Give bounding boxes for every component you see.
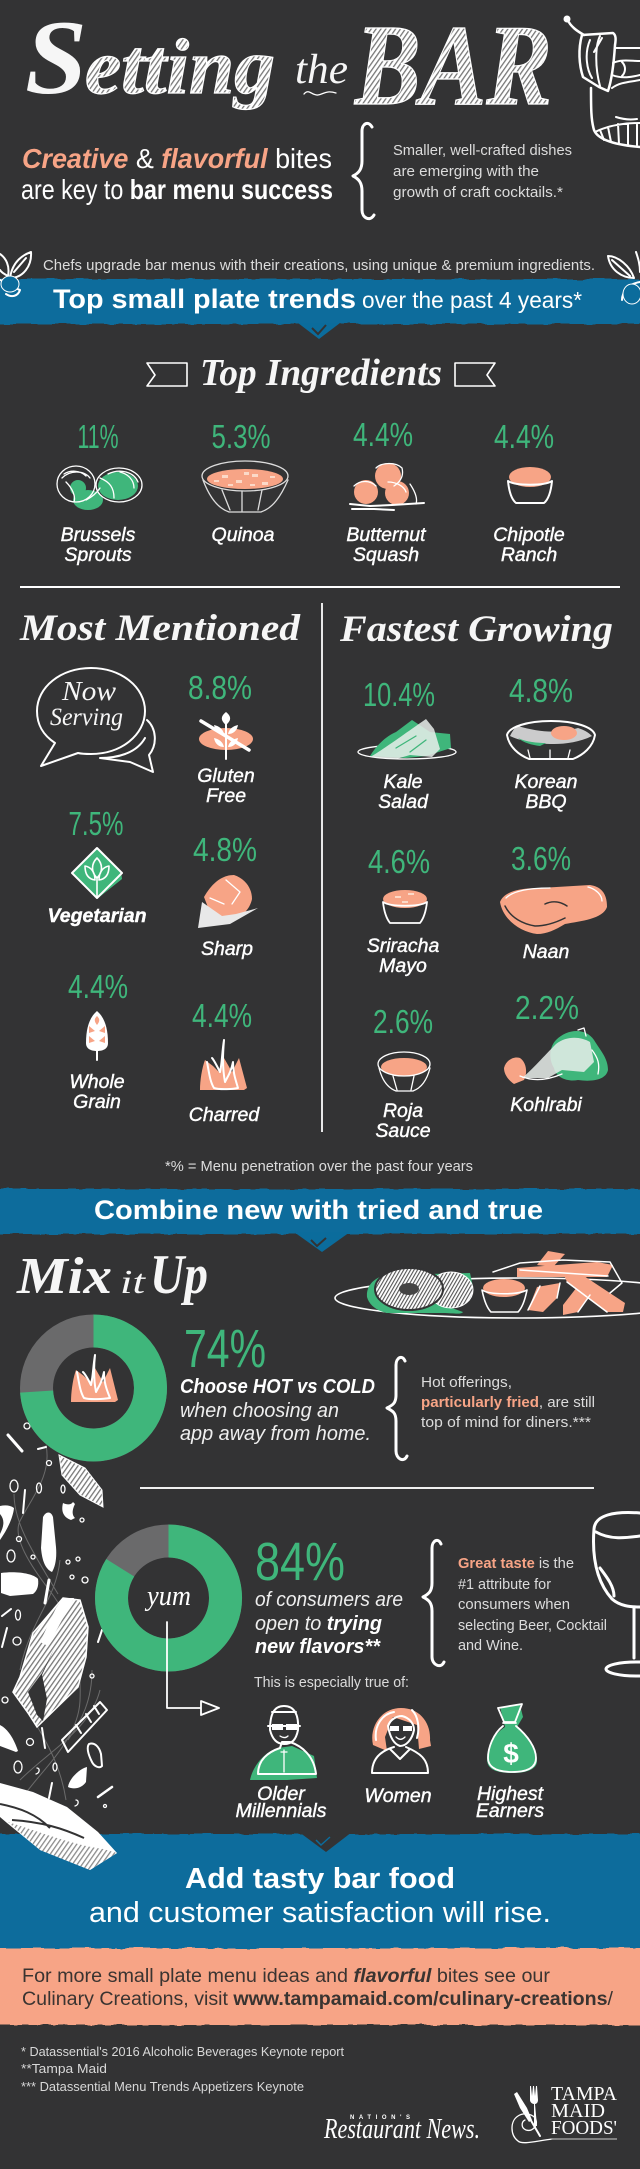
stat: 84 percent	[254, 1532, 409, 1691]
intro headline: are key to bar menu success	[21, 174, 333, 205]
item: butternut squash: Butternut	[346, 524, 427, 546]
heading: mix it up: it	[120, 1264, 147, 1301]
title: BAR	[353, 2, 552, 130]
item: sharp: Sharp	[201, 938, 253, 960]
item: kale salad	[358, 676, 456, 813]
logo: tampa maid foods: FOODS'	[551, 2117, 617, 2139]
note: great taste: selecting Beer, Cocktail	[458, 1618, 607, 1634]
item: kohlrabi: 2.2%	[515, 989, 579, 1026]
banner: top small plate trends: over the past 4 years*	[362, 287, 582, 313]
note: hot offerings: particularly fried , are still	[421, 1395, 595, 1411]
item: kale salad: Kale	[383, 771, 423, 793]
divider	[20, 586, 620, 588]
item: korean bbq: 4.8%	[509, 672, 573, 709]
brace	[353, 123, 374, 219]
donut chart: 74 percent	[36, 1331, 150, 1445]
item: roja sauce: 2.6%	[373, 1003, 433, 1040]
now serving speech bubble	[37, 668, 155, 772]
intro headline	[21, 143, 333, 205]
brace	[423, 1540, 444, 1666]
item: kohlrabi	[504, 989, 608, 1116]
stat: 74 percent: 74%	[184, 1319, 266, 1379]
item: chipotle ranch: 4.4%	[494, 418, 554, 455]
item: quinoa: 5.3%	[212, 418, 270, 455]
person: highest earners: Highest	[477, 1783, 545, 1805]
icon: wine glass	[594, 1513, 640, 1676]
item: sriracha mayo: Mayo	[379, 955, 427, 977]
person: older millennials	[235, 1706, 327, 1822]
stat: 84 percent: new flavors**	[255, 1636, 381, 1658]
item: charred	[189, 997, 260, 1126]
item: korean bbq: Korean	[515, 771, 577, 793]
intro headline: Creative & flavorful bites	[22, 143, 332, 174]
item: charred: Charred	[189, 1104, 260, 1126]
heading: mix it up: Mix	[16, 1248, 112, 1305]
banner: more menu ideas: For more small plate menu ideas and flavorful bites see our	[22, 1966, 551, 1987]
item: korean bbq	[507, 672, 595, 813]
banner: more menu ideas: Culinary Creations, visit www.tampamaid.com/culinary-creations /	[22, 1989, 614, 2010]
heading: top ingredients: Top Ingredients	[200, 352, 442, 394]
title: S	[25, 0, 87, 116]
center divider	[321, 603, 323, 1132]
item: naan: 3.6%	[511, 840, 571, 877]
stat: 84 percent: of consumers are	[255, 1589, 403, 1611]
item: roja sauce: Sauce	[375, 1120, 431, 1142]
stat: 84 percent: open to trying	[255, 1613, 382, 1635]
stat: 74 percent: Choose HOT vs COLD	[180, 1376, 375, 1398]
person: women: Women	[364, 1785, 432, 1807]
item: butternut squash: Squash	[353, 544, 419, 566]
item: gluten free	[188, 669, 255, 807]
item: butternut squash	[346, 416, 427, 566]
sources: *** Datassential Menu Trends Appetizers Keynote	[21, 2079, 304, 2094]
illustration: plate of appetizers	[335, 1251, 640, 1318]
stat: 74 percent	[180, 1319, 375, 1445]
donut chart: 84 percent: yum	[144, 1581, 191, 1612]
person: older millennials: Older	[257, 1783, 306, 1805]
item: brussels sprouts: 11%	[78, 418, 118, 455]
banner: add tasty bar food: and customer satisfaction will rise.	[89, 1897, 551, 1929]
item: quinoa: Quinoa	[212, 524, 275, 546]
item: whole grain: Whole	[69, 1071, 125, 1093]
sources: * Datassential's 2016 Alcoholic Beverages Keynote report	[21, 2044, 344, 2059]
intro side note: are emerging with the	[393, 164, 539, 180]
note: great taste: #1 attribute for	[458, 1577, 551, 1593]
icon: cocktail glass	[564, 16, 640, 147]
note: great taste: and Wine.	[458, 1638, 523, 1654]
item: chipotle ranch: Chipotle	[493, 524, 565, 546]
item: whole grain: Grain	[73, 1091, 121, 1113]
note: great taste	[458, 1556, 607, 1654]
heading: mix it up	[16, 1244, 208, 1306]
item: vegetarian: Vegetarian	[48, 905, 147, 927]
person: highest earners: $	[503, 1738, 519, 1769]
now serving speech bubble: Now	[61, 676, 116, 706]
logo: tampa maid foods: TAMPA	[551, 2083, 618, 2105]
item: butternut squash: 4.4%	[353, 416, 413, 453]
item: sriracha mayo: 4.6%	[368, 843, 430, 880]
item: brussels sprouts: Sprouts	[64, 544, 132, 566]
item: roja sauce: Roja	[383, 1100, 423, 1122]
heading: fastest growing: Fastest Growing	[339, 609, 613, 650]
logo: nation's restaurant news: NATION'S	[350, 2115, 410, 2121]
item: sriracha mayo	[367, 843, 439, 977]
item: chipotle ranch: Ranch	[501, 544, 557, 566]
banner: add tasty bar food: Add tasty bar food	[185, 1863, 455, 1895]
item: whole grain	[68, 968, 128, 1113]
item: whole grain: 4.4%	[68, 968, 128, 1005]
heading: most mentioned: Most Mentioned	[19, 608, 301, 649]
stat: 84 percent: 84%	[255, 1532, 345, 1592]
item: sharp: 4.8%	[193, 831, 257, 868]
item: roja sauce	[373, 1003, 433, 1142]
intro side note: Smaller, well-crafted dishes	[393, 143, 572, 159]
footnote: menu penetration: *% = Menu penetration over the past four years	[165, 1159, 473, 1175]
item: gluten free: 8.8%	[188, 669, 252, 706]
banner: top small plate trends: Top small plate trends	[53, 284, 356, 314]
item: kale salad: Salad	[378, 791, 429, 813]
item: chipotle ranch	[493, 418, 565, 566]
item: kale salad: 10.4%	[363, 676, 435, 713]
banner: add tasty bar food	[0, 1832, 640, 1948]
logo: nation's restaurant news: Restaurant News.	[323, 2114, 480, 2145]
banner: top small plate trends	[0, 279, 640, 339]
intro side note: growth of craft cocktails.*	[393, 185, 563, 201]
item: naan: Naan	[523, 941, 569, 963]
arrow	[167, 1622, 219, 1715]
now serving speech bubble: Serving	[50, 704, 123, 731]
note: great taste: consumers when	[458, 1597, 570, 1613]
person: women	[364, 1708, 432, 1807]
item: gluten free: Gluten	[197, 765, 255, 787]
item: quinoa	[202, 418, 288, 546]
illustration: falling food sketch	[0, 1423, 112, 1808]
person: highest earners: Earners	[476, 1800, 544, 1822]
illustration: bowl swoosh	[0, 1783, 117, 1870]
banner: combine new with tried and true: Combine new with tried and true	[94, 1195, 543, 1225]
item: korean bbq: BBQ	[525, 791, 567, 813]
stat: 74 percent: when choosing an	[180, 1400, 339, 1422]
icon: leaves left	[0, 252, 31, 296]
banner: combine new with tried and true	[0, 1189, 640, 1252]
item: sriracha mayo: Sriracha	[367, 935, 439, 957]
item: kohlrabi: Kohlrabi	[510, 1094, 582, 1116]
icon: flame	[71, 1355, 118, 1402]
intro side note	[393, 143, 572, 201]
item: vegetarian	[48, 805, 147, 927]
note: hot offerings: Hot offerings,	[421, 1375, 512, 1391]
item: charred: 4.4%	[192, 997, 252, 1034]
banner: more menu ideas	[0, 1948, 640, 2025]
brace	[387, 1357, 407, 1460]
logo: tampa maid foods	[512, 2083, 618, 2143]
item: gluten free: Free	[206, 785, 246, 807]
logo: tampa maid foods: MAID	[551, 2100, 605, 2122]
title: etting	[85, 23, 275, 110]
item: vegetarian: 7.5%	[68, 805, 124, 842]
chefs sentence: Chefs upgrade bar menus with their creations, using unique & premium ingredients.	[43, 258, 595, 274]
sources: **Tampa Maid	[21, 2061, 107, 2076]
note: hot offerings	[421, 1375, 595, 1431]
note: hot offerings: top of mind for diners.***	[421, 1415, 591, 1431]
sources	[21, 2044, 344, 2094]
donut chart: 84 percent	[112, 1541, 226, 1655]
item: sharp	[193, 831, 258, 960]
person: highest earners	[476, 1704, 545, 1822]
divider	[140, 1487, 594, 1489]
note: great taste: Great taste is the	[458, 1556, 574, 1572]
icon: leaves right	[608, 252, 640, 304]
item: brussels sprouts	[57, 418, 142, 566]
heading: mix it up: Up	[150, 1244, 208, 1306]
stat: 84 percent: This is especially true of:	[254, 1675, 409, 1691]
item: brussels sprouts: Brussels	[61, 524, 136, 546]
title: the	[295, 47, 348, 93]
title	[25, 0, 552, 130]
person: older millennials: Millennials	[235, 1800, 327, 1822]
stat: 74 percent: app away from home.	[180, 1423, 371, 1445]
item: naan	[500, 840, 607, 963]
